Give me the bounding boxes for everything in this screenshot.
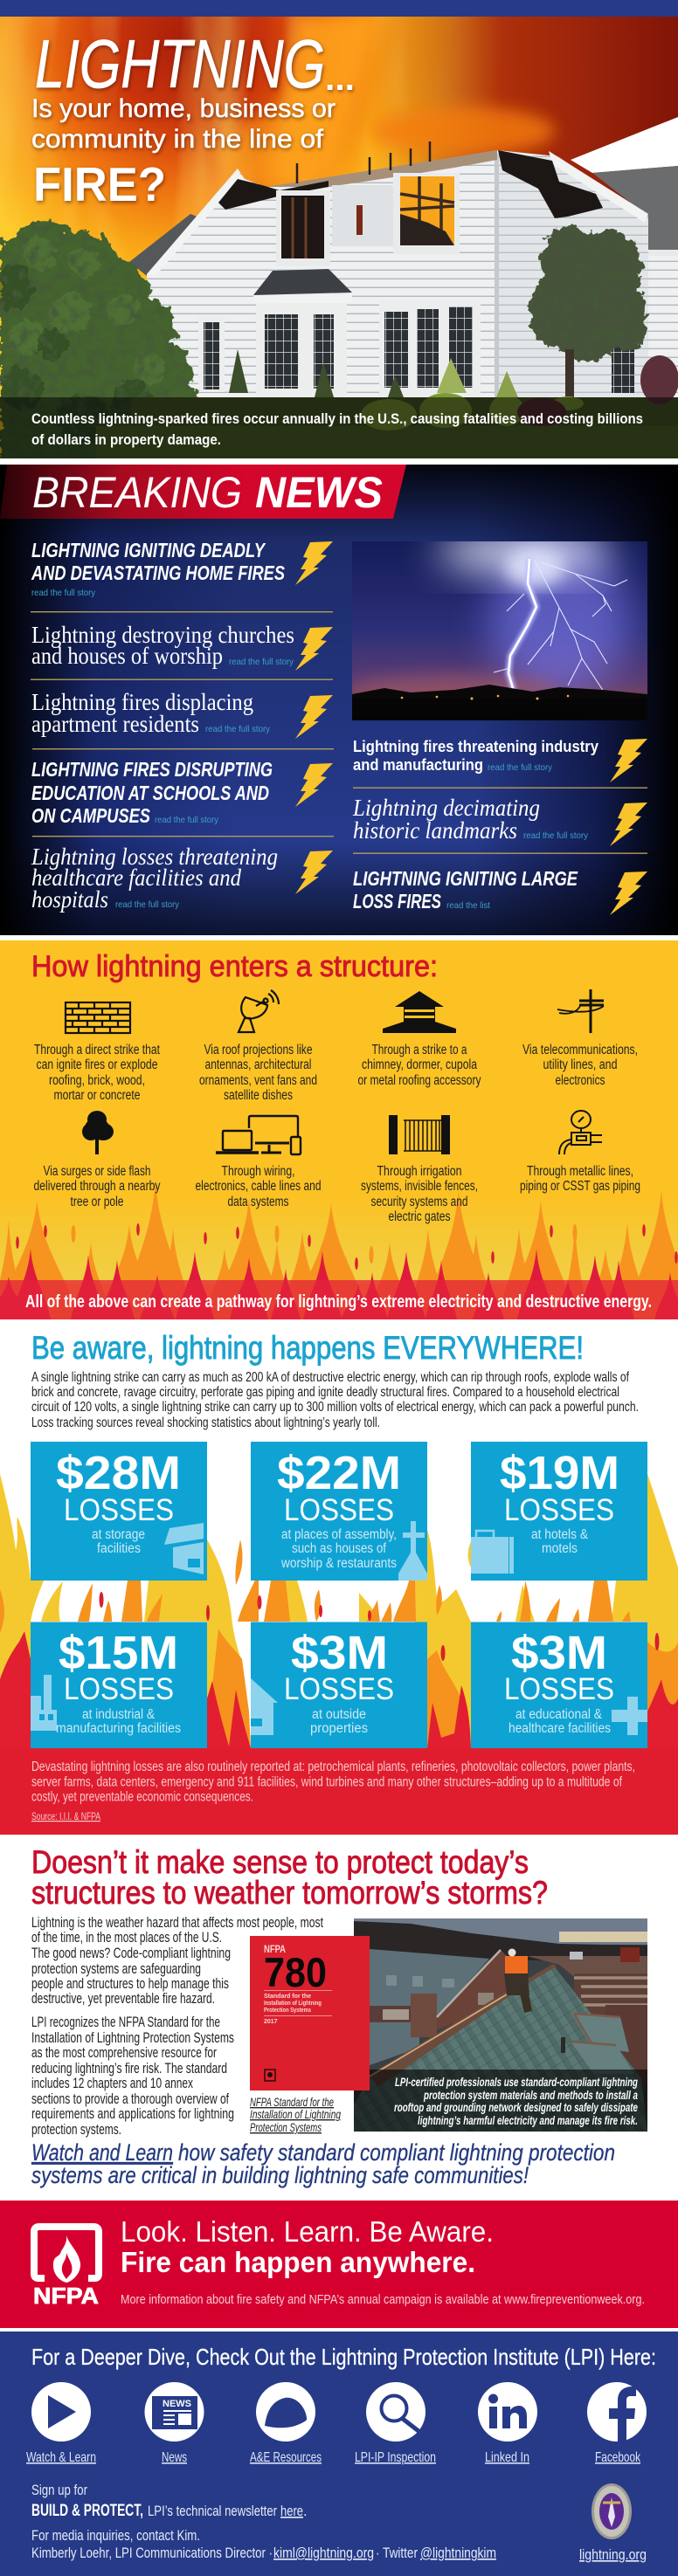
item: metallic lines xyxy=(520,1111,640,1194)
icon: box xyxy=(164,1523,204,1574)
right tree xyxy=(529,225,648,402)
panel: how lightning enters xyxy=(0,940,678,1319)
small roof and bay xyxy=(253,269,352,295)
item: chimney: or metal roofing accessory xyxy=(358,1073,481,1088)
body text: people and structures to help manage this xyxy=(31,1976,229,1992)
card: assembly: such as houses of xyxy=(292,1541,387,1556)
hero title: LIGHTNING xyxy=(35,25,325,102)
newsletter and contact: Kimberly Loehr, LPI Communications Director · xyxy=(31,2545,273,2561)
link: LPI-IP inspection: LPI-IP Inspection xyxy=(355,2450,436,2465)
card: education and healthcare xyxy=(471,1622,647,1748)
item: metallic lines: Through metallic lines, xyxy=(527,1164,633,1179)
item: roof projections xyxy=(199,990,317,1103)
NFPA message: Fire can happen anywhere. xyxy=(121,2246,475,2278)
panel: be aware xyxy=(0,1319,678,1835)
item: chimney xyxy=(358,991,481,1088)
newsletter and contact: here xyxy=(280,2504,303,2519)
book caption xyxy=(250,2095,341,2134)
body text: protection systems. xyxy=(31,2122,121,2138)
panel: hero xyxy=(0,17,678,480)
top bar xyxy=(0,0,678,17)
fire background xyxy=(0,17,678,458)
card: hotels: at hotels & xyxy=(531,1527,589,1542)
story: apartments: apartment residents xyxy=(31,711,199,737)
story: churches: read the full story xyxy=(229,657,294,667)
upper windows xyxy=(276,190,330,266)
item: side flash xyxy=(33,1111,161,1209)
body text: Installation of Lightning Protection Systems xyxy=(31,2030,234,2046)
card: hotels: LOSSES xyxy=(504,1493,614,1527)
item: direct strike: Through a direct strike that xyxy=(34,1043,161,1057)
newsletter and contact: Sign up for xyxy=(31,2483,87,2498)
intro text: Loss tracking sources reveal shocking statistics about lightning’s yearly toll. xyxy=(31,1415,380,1430)
story: churches: Lightning destroying churches xyxy=(31,622,294,648)
card: storage: facilities xyxy=(97,1541,141,1556)
card: assembly: LOSSES xyxy=(284,1493,394,1527)
body text: reducing lightning’s fire risk. The standard xyxy=(31,2061,227,2077)
book: NFPA 780: Protection Systems xyxy=(264,2008,311,2014)
item: irrigation: Through irrigation xyxy=(377,1164,461,1179)
flames xyxy=(0,1181,678,1319)
story: apartments xyxy=(31,689,333,739)
item: telecommunications: electronics xyxy=(556,1073,605,1088)
link: LPI-IP inspection xyxy=(355,2382,436,2465)
card: storage: LOSSES xyxy=(64,1493,174,1527)
panel: breaking news xyxy=(0,465,678,935)
watch and learn xyxy=(31,2139,615,2188)
book: NFPA 780: Installation of Lightning xyxy=(264,2001,322,2007)
card: storage: $28M xyxy=(56,1447,181,1499)
book: NFPA 780: Standard for the xyxy=(264,1994,311,2000)
body text: destructive, yet preventable fire hazard. xyxy=(31,1991,215,2007)
item: roof projections: satellite dishes xyxy=(224,1088,293,1103)
book: NFPA 780: 2017 xyxy=(264,2019,278,2025)
newsletter and contact: For media inquiries, contact Kim. xyxy=(31,2528,200,2544)
link: news xyxy=(145,2382,204,2465)
link: LinkedIn: Linked In xyxy=(485,2450,529,2465)
panel: deeper dive xyxy=(0,2331,678,2576)
card: outside properties: properties xyxy=(310,1721,368,1736)
book caption: Protection Systems xyxy=(250,2120,322,2134)
icon: utility pole xyxy=(557,989,604,1033)
card: storage: at storage xyxy=(92,1527,145,1542)
heading: Doesn’t it make sense to protect today’s xyxy=(31,1844,529,1880)
story: industry: read the full story xyxy=(488,762,553,773)
item: wiring: data systems xyxy=(227,1195,289,1209)
icon: church steeple xyxy=(398,1521,427,1581)
body text: requirements and applications for lightning xyxy=(31,2106,234,2122)
story: industry: Lightning fires threatening industry xyxy=(353,737,599,755)
card: hotels: motels xyxy=(542,1541,578,1556)
story: landmarks: read the full story xyxy=(523,830,589,841)
NFPA logo: NFPA xyxy=(33,2283,99,2309)
story: home fires: LIGHTNING IGNITING DEADLY xyxy=(31,539,266,561)
item: irrigation: electric gates xyxy=(388,1209,451,1224)
icon: satellite dish xyxy=(239,990,279,1032)
card: education and healthcare: LOSSES xyxy=(504,1672,614,1706)
item: wiring xyxy=(196,1116,322,1209)
card: education and healthcare: healthcare facilities xyxy=(508,1721,611,1736)
icon: cupola xyxy=(383,991,456,1033)
story: healthcare: healthcare facilities and xyxy=(31,864,241,891)
heading xyxy=(31,1844,548,1911)
watch and learn: Watch and Learn xyxy=(31,2139,173,2166)
body text: as the most comprehensive resource for xyxy=(31,2045,217,2061)
story: apartments: read the full story xyxy=(205,724,271,734)
newsletter and contact: · Twitter xyxy=(376,2545,418,2561)
story: schools xyxy=(31,758,333,827)
icon: suitcase xyxy=(471,1531,514,1574)
closing text xyxy=(31,1760,635,1822)
card: industrial: LOSSES xyxy=(64,1672,174,1706)
card: hotels xyxy=(471,1442,647,1581)
house xyxy=(129,117,678,410)
card: assembly: worship & restaurants xyxy=(280,1556,397,1571)
heading: How lightning enters a structure: xyxy=(31,950,438,983)
lightning photo xyxy=(349,531,647,720)
card: industrial: at industrial & xyxy=(82,1707,156,1722)
panel: protect structures xyxy=(31,1849,647,2188)
body text xyxy=(31,1915,323,2138)
flames xyxy=(0,1474,678,1835)
icon: gas meter xyxy=(559,1111,602,1154)
item: irrigation: systems, invisible fences, xyxy=(361,1179,478,1194)
item: direct strike: can ignite fires or explode xyxy=(37,1057,157,1072)
card: industrial: manufacturing facilities xyxy=(56,1721,181,1736)
story: schools: LIGHTNING FIRES DISRUPTING xyxy=(31,758,273,781)
card: industrial xyxy=(31,1622,207,1748)
panel: NFPA xyxy=(0,2201,678,2328)
card: storage xyxy=(31,1442,207,1581)
hero title: Is your home, business or xyxy=(31,94,336,123)
story: healthcare: read the full story xyxy=(115,899,180,910)
story: landmarks xyxy=(352,795,647,846)
left tree xyxy=(0,221,201,480)
LPI badge: lightning.org xyxy=(579,2547,647,2563)
item: side flash: tree or pole xyxy=(70,1195,124,1209)
heading: structures to weather tomorrow’s storms? xyxy=(31,1875,548,1911)
banner: BREAKING xyxy=(32,468,242,517)
link: Facebook xyxy=(587,2382,647,2465)
body text: The good news? Code-compliant lightning xyxy=(31,1946,231,1961)
heading: Be aware, lightning happens EVERYWHERE! xyxy=(31,1330,584,1366)
story: schools: ON CAMPUSES xyxy=(31,804,151,827)
story: large loss fires: read the list xyxy=(446,900,490,911)
body text: protection systems are safeguarding xyxy=(31,1961,201,1977)
intro text xyxy=(31,1370,639,1430)
story: industry xyxy=(353,737,647,782)
item: chimney: chimney, dormer, cupola xyxy=(362,1057,477,1072)
link: watch and learn: Watch & Learn xyxy=(26,2450,96,2465)
pathway band xyxy=(0,1280,678,1319)
item: roof projections: antennas, architectural xyxy=(204,1057,311,1072)
newsletter and contact xyxy=(31,2483,496,2561)
body text: includes 12 chapters and 10 annex xyxy=(31,2076,194,2091)
link: A&E resources: A&E Resources xyxy=(250,2450,322,2465)
story: large loss fires xyxy=(353,867,647,915)
newsletter and contact: . xyxy=(303,2504,308,2519)
hero title: community in the line of xyxy=(31,125,324,154)
shrubs and lawn xyxy=(96,349,678,458)
item: wiring: Through wiring, xyxy=(222,1164,295,1179)
story: landmarks: Lightning decimating xyxy=(352,795,540,821)
LPI badge xyxy=(579,2483,647,2563)
icon: tree xyxy=(82,1111,114,1154)
item: direct strike xyxy=(34,1002,161,1103)
newsletter and contact: @lightningkim xyxy=(420,2545,496,2561)
hero title: ... xyxy=(325,59,355,98)
newsletter and contact: BUILD & PROTECT, xyxy=(31,2502,143,2520)
story: home fires: AND DEVASTATING HOME FIRES xyxy=(31,561,286,584)
story: schools: read the full story xyxy=(155,815,219,825)
item: wiring: electronics, cable lines and xyxy=(196,1179,322,1194)
hero title xyxy=(31,38,356,205)
card: industrial: $15M xyxy=(59,1627,178,1679)
story: healthcare: hospitals xyxy=(31,886,108,913)
photo caption xyxy=(354,2070,647,2132)
item: chimney: Through a strike to a xyxy=(372,1043,467,1057)
closing text: costly, yet preventable economic consequences. xyxy=(31,1790,253,1804)
watch and learn: systems are critical in building lightning safe communities! xyxy=(31,2162,529,2188)
icon: house xyxy=(251,1678,278,1735)
item: telecommunications: utility lines, and xyxy=(543,1057,617,1072)
item: irrigation xyxy=(361,1115,478,1224)
body text: of the time, in the most places of the U.S. xyxy=(31,1930,222,1946)
icon: devices xyxy=(216,1116,301,1154)
item: telecommunications: Via telecommunications, xyxy=(522,1043,638,1057)
story: industry: and manufacturing xyxy=(353,755,483,774)
book: NFPA 780 xyxy=(250,1936,370,2090)
hero title: FIRE? xyxy=(33,157,166,211)
story: healthcare xyxy=(31,844,333,913)
story: churches: and houses of worship xyxy=(31,643,223,669)
bottom shade xyxy=(0,397,678,458)
NFPA message xyxy=(121,2215,645,2307)
card: outside properties: $3M xyxy=(291,1627,388,1679)
card: assembly: $22M xyxy=(277,1447,401,1499)
book caption: Installation of Lightning xyxy=(250,2107,341,2121)
item: direct strike: mortar or concrete xyxy=(54,1088,140,1103)
story: apartments: Lightning fires displacing xyxy=(31,689,253,715)
book: NFPA 780: 780 xyxy=(264,1949,327,1995)
banner xyxy=(0,465,406,519)
card: outside properties xyxy=(251,1622,427,1748)
item: roof projections: Via roof projections like xyxy=(204,1043,313,1057)
body text: LPI recognizes the NFPA Standard for the xyxy=(31,2015,220,2030)
closing text: Source: I.I.I. & NFPA xyxy=(31,1810,100,1822)
story: large loss fires: LOSS FIRES xyxy=(353,890,441,913)
NFPA message: Look. Listen. Learn. Be Aware. xyxy=(121,2215,494,2248)
item: side flash: delivered through a nearby xyxy=(33,1179,161,1194)
hero caption xyxy=(31,410,643,448)
body text: Lightning is the weather hazard that affects most people, most xyxy=(31,1915,323,1931)
story: large loss fires: LIGHTNING IGNITING LARGE xyxy=(353,867,578,890)
link: A&E resources xyxy=(250,2382,322,2465)
card: outside properties: LOSSES xyxy=(284,1672,394,1706)
newsletter and contact: kiml@lightning.org xyxy=(273,2545,374,2561)
newsletter and contact: LPI’s technical newsletter xyxy=(148,2504,277,2519)
link: LinkedIn xyxy=(478,2382,537,2465)
icon: gate xyxy=(389,1115,450,1154)
card: assembly: at places of assembly, xyxy=(281,1527,397,1542)
story: landmarks: historic landmarks xyxy=(353,817,517,844)
story: schools: EDUCATION AT SCHOOLS AND xyxy=(31,782,269,804)
card: education and healthcare: at educational & xyxy=(515,1707,603,1722)
story: healthcare: Lightning losses threatening xyxy=(31,844,278,870)
card: outside properties: at outside xyxy=(312,1707,366,1722)
card: education and healthcare: $3M xyxy=(511,1627,607,1679)
item: metallic lines: piping or CSST gas piping xyxy=(520,1179,640,1194)
book: NFPA 780: NFPA xyxy=(264,1943,286,1955)
item: direct strike: roofing, brick, wood, xyxy=(49,1073,145,1088)
icon: factory xyxy=(31,1675,57,1731)
item: irrigation: security systems and xyxy=(370,1195,468,1209)
story: home fires xyxy=(31,539,333,598)
hero caption: of dollars in property damage. xyxy=(31,431,221,448)
item: side flash: Via surges or side flash xyxy=(44,1164,150,1179)
icon: plus xyxy=(612,1697,647,1735)
icon: brick wall xyxy=(66,1002,130,1033)
card: assembly xyxy=(251,1442,427,1581)
story: churches xyxy=(31,622,333,671)
book caption: NFPA Standard for the xyxy=(250,2095,334,2109)
card: hotels: $19M xyxy=(500,1447,619,1499)
banner: NEWS xyxy=(255,468,383,517)
body text: sections to provide a thorough overview of xyxy=(31,2091,229,2107)
item: telecommunications xyxy=(522,989,638,1088)
link: news: News xyxy=(162,2450,187,2465)
item: roof projections: ornaments, vent fans and xyxy=(199,1073,317,1088)
link: watch and learn xyxy=(26,2382,96,2465)
roof photo xyxy=(354,1918,647,2132)
link: news: NEWS xyxy=(163,2399,191,2409)
NFPA logo xyxy=(33,2227,99,2309)
story: home fires: read the full story xyxy=(31,588,96,598)
link: Facebook: Facebook xyxy=(595,2450,641,2465)
